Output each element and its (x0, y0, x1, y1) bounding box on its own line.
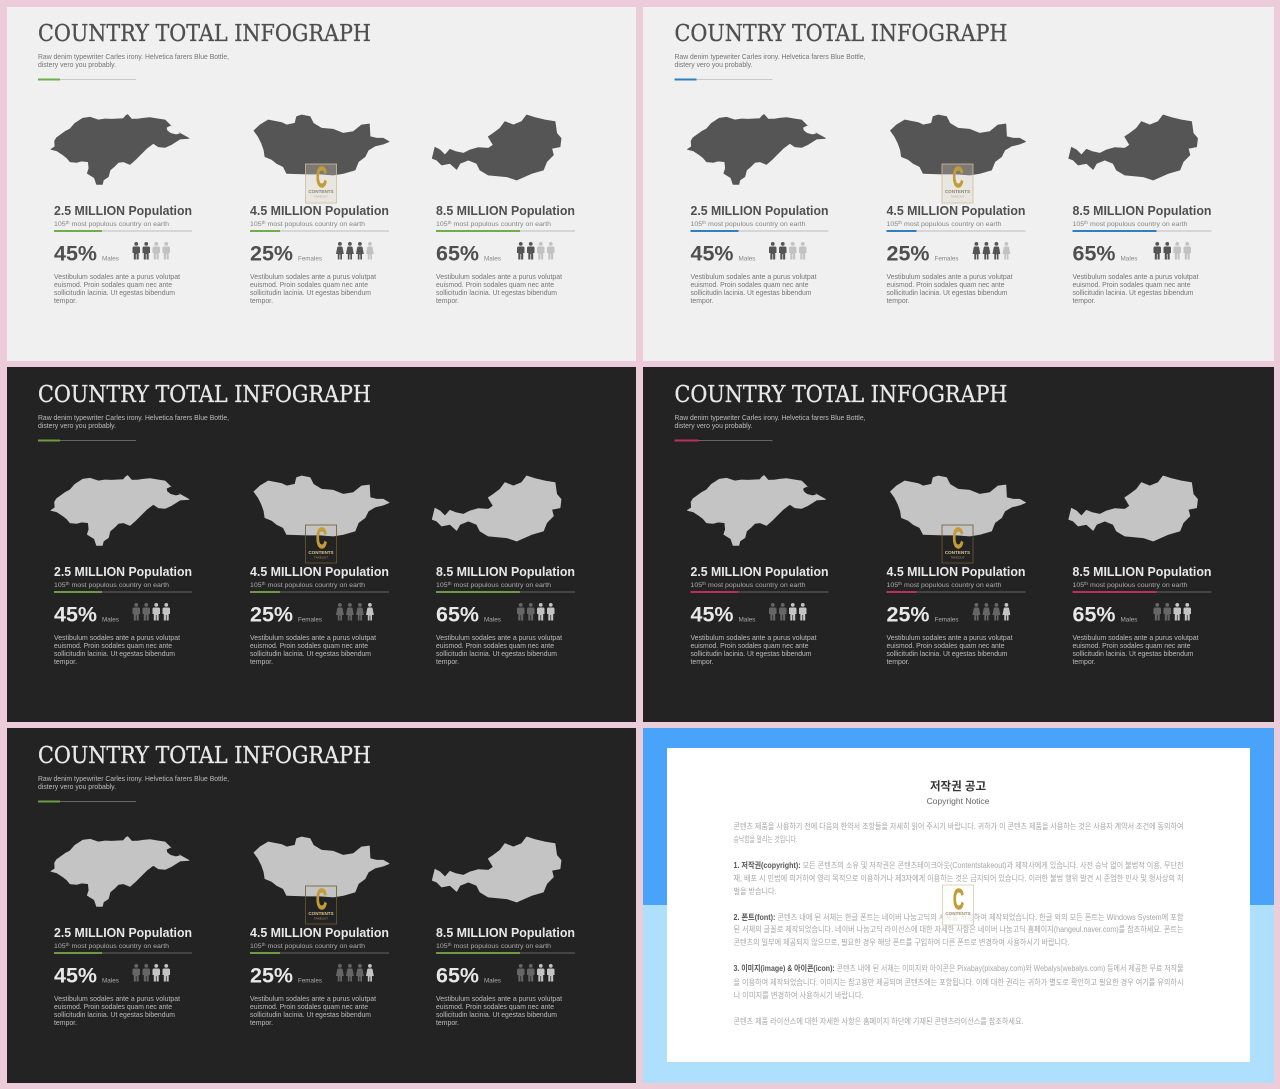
icons: people (132, 964, 170, 982)
intro text: 콘텐츠 제품을 사용하기 전에 다음의 한약서 조항들을 자세히 읽어 주시기 바랍니다. 귀하가 이 콘텐츠 제품을 사용하는 것은 사용자 계약서 조건에 동의하여 (734, 821, 1184, 831)
map: Mongolia (254, 837, 389, 897)
section 1: copyright: 벌을 받습니다. (734, 886, 776, 896)
column: Austria (1069, 115, 1212, 305)
icons: people (517, 603, 554, 620)
description: euismod. Proin sodales quam nec ante (690, 280, 808, 289)
population heading: 8.5 MILLION Population (436, 564, 575, 579)
subtitle: distery vero you probably. (38, 60, 116, 69)
progress bar (690, 230, 828, 232)
watermark logo: CONTENTS (308, 189, 334, 194)
gender label: Males (484, 256, 501, 262)
description: euismod. Proin sodales quam nec ante (250, 280, 368, 289)
percentage: 25% (886, 602, 930, 626)
description (690, 272, 816, 305)
section 1: copyright: 재, 배포 시 민법에 의거하여 영리 목적으로 이용하거나 제3자에게 이용하는 것은 금지되어 있습니다. 이러한 불법 행위 발견 시 준엄한 민사 및 형사상의 처 (734, 873, 1184, 883)
subtitle: distery vero you probably. (674, 421, 753, 430)
description (250, 633, 376, 666)
watermark logo: TAKEOUT (314, 194, 328, 198)
gender label: Males (102, 978, 119, 984)
rank note: most populous country on earth (70, 221, 169, 228)
column: Mongolia (250, 115, 389, 305)
percentage: 65% (436, 242, 479, 266)
section 3: image and icon: 을 이용하여 제작되었습니다. 이미지는 참고용만 제공되며 콘텐츠에는 포함됩니다. 이에 대한 권리는 귀하가 별도로 확인하고 필요한 경우 여기를 유의하시 (734, 977, 1184, 987)
description: Vestibulum sodales ante a purus volutpat (436, 994, 562, 1003)
rank note: th (262, 220, 266, 225)
percentage: 25% (250, 602, 293, 626)
rank note: most populous country on earth (452, 221, 551, 228)
rank note: 105 (1072, 582, 1084, 589)
watermark logo: CONTENTS (308, 550, 334, 555)
rank note: most populous country on earth (266, 582, 365, 589)
icons: people (769, 242, 806, 260)
subtitle: Raw denim typewriter Carles irony. Helvetica farers Blue Bottle, (674, 52, 866, 61)
watermark logo: C (953, 884, 964, 916)
intro text (734, 821, 1184, 844)
title rule (38, 78, 136, 80)
icons: people (336, 242, 374, 260)
rank note: 105 (54, 943, 65, 950)
description: Vestibulum sodales ante a purus volutpat (1072, 633, 1198, 642)
rank note: 105 (436, 582, 447, 589)
gender label: Males (102, 618, 119, 624)
column: Austria (432, 115, 575, 305)
rank note: 105 (436, 221, 447, 228)
watermark logo (306, 162, 336, 203)
rank note: 105 (54, 582, 65, 589)
description: sollicitudin lacinia. Ut egestas bibendum (250, 288, 371, 297)
population heading: 2.5 MILLION Population (54, 925, 192, 940)
description: sollicitudin lacinia. Ut egestas bibendum (690, 649, 812, 658)
map: Austria (432, 115, 561, 180)
watermark logo: C (952, 523, 964, 555)
description: euismod. Proin sodales quam nec ante (886, 280, 1004, 289)
description: euismod. Proin sodales quam nec ante (1072, 641, 1190, 650)
gender label: Females (298, 978, 322, 984)
description: tempor. (1072, 657, 1096, 666)
description (54, 994, 180, 1027)
gender label: Females (934, 618, 958, 624)
rank note: th (66, 942, 70, 947)
map: Honduras (687, 115, 825, 184)
watermark logo: TAKEOUT (314, 556, 328, 560)
rank note: 105 (690, 221, 702, 228)
population heading: 4.5 MILLION Population (886, 203, 1026, 218)
rank note: 105 (54, 221, 65, 228)
map: Mongolia (254, 476, 389, 536)
rank note: th (1084, 220, 1089, 225)
description: euismod. Proin sodales quam nec ante (1072, 280, 1190, 289)
rank note: 105 (250, 582, 261, 589)
section 3: image and icon (734, 963, 1184, 1000)
description: tempor. (886, 296, 910, 305)
description: tempor. (54, 1018, 77, 1027)
description: tempor. (1072, 296, 1096, 305)
rank note: th (448, 942, 452, 947)
watermark logo: TAKEOUT (314, 916, 328, 920)
gender label: Males (738, 256, 756, 262)
map: Mongolia (890, 476, 1025, 536)
rank note: 105 (1072, 221, 1084, 228)
watermark logo: C (316, 884, 327, 916)
progress bar (1072, 230, 1212, 232)
subtitle: Raw denim typewriter Carles irony. Helvetica farers Blue Bottle, (38, 52, 229, 61)
column: Austria (432, 837, 575, 1027)
map: Mongolia (890, 115, 1025, 175)
rank note: most populous country on earth (452, 582, 551, 589)
column: Honduras (51, 476, 192, 666)
icons: people (132, 603, 170, 620)
title rule (674, 440, 772, 442)
progress bar (250, 230, 389, 232)
description: tempor. (436, 1018, 459, 1027)
rank note: th (448, 581, 452, 586)
description: Vestibulum sodales ante a purus volutpat (1072, 272, 1198, 281)
percentage: 65% (436, 964, 479, 988)
description: euismod. Proin sodales quam nec ante (54, 1002, 172, 1011)
percentage: 45% (54, 242, 97, 266)
description: sollicitudin lacinia. Ut egestas bibendum (54, 649, 175, 658)
rank note: th (898, 581, 903, 586)
gender label: Males (1120, 256, 1138, 262)
panel: copyright notice (643, 728, 1274, 1083)
rank note: most populous country on earth (1088, 221, 1188, 228)
percentage: 25% (250, 242, 293, 266)
description: Vestibulum sodales ante a purus volutpat (690, 633, 816, 642)
rank note: th (702, 220, 707, 225)
column: Mongolia (886, 115, 1026, 305)
watermark logo (942, 523, 973, 563)
map: Mongolia (254, 115, 389, 175)
population heading: 2.5 MILLION Population (54, 203, 192, 218)
watermark logo (306, 523, 336, 563)
progress bar (54, 952, 192, 954)
notice subheading: Copyright Notice (927, 796, 990, 806)
population heading: 8.5 MILLION Population (436, 203, 575, 218)
title: COUNTRY TOTAL INFOGRAPH (674, 382, 1008, 408)
watermark logo: CONTENTS (308, 911, 334, 916)
watermark logo: C (952, 162, 964, 194)
description: Vestibulum sodales ante a purus volutpat (54, 272, 180, 281)
icons: people (517, 964, 554, 982)
percentage: 65% (1072, 602, 1116, 626)
rank note: most populous country on earth (266, 221, 365, 228)
section 2: font: 콘텐츠의 일부에 제공되지 않으므로, 필요한 경우 해당 폰트를 구입하여 다른 폰트로 변경하여 사용하시기 바랍니다. (734, 937, 1070, 947)
map: Honduras (51, 115, 189, 184)
column: Honduras (687, 115, 829, 305)
description: tempor. (436, 657, 459, 666)
percentage: 65% (436, 602, 479, 626)
title: COUNTRY TOTAL INFOGRAPH (38, 21, 371, 47)
map: Austria (432, 476, 561, 541)
description (886, 633, 1012, 666)
rank note: 105 (690, 582, 702, 589)
subtitle: Raw denim typewriter Carles irony. Helvetica farers Blue Bottle, (38, 413, 229, 422)
description (886, 272, 1012, 305)
panel: light slide green (7, 7, 636, 361)
notice heading: 저작권 공고 (930, 779, 986, 793)
progress bar (436, 230, 575, 232)
license note: 콘텐츠 제품 라이선스에 대한 자세한 사항은 홈페이지 하단에 기재된 콘텐츠라이선스를 참조하세요. (734, 1016, 1024, 1026)
description (250, 994, 376, 1027)
watermark logo: TAKEOUT (951, 194, 965, 198)
title: COUNTRY TOTAL INFOGRAPH (38, 743, 371, 769)
percentage: 45% (54, 964, 97, 988)
description: tempor. (886, 657, 910, 666)
rank note: 105 (436, 943, 447, 950)
rank note: most populous country on earth (902, 582, 1002, 589)
section 3: image and icon: 3. 이미지(image) & 아이콘(icon): 콘텐츠 내에 된 서체는 이미지와 아이콘은 Pixabay(pixabay.com)와 Webalys(webalys.com) 등에서 제공한 무료 저작물 (734, 963, 1184, 973)
description: tempor. (250, 296, 273, 305)
percentage: 65% (1072, 242, 1116, 266)
rank note: most populous country on earth (70, 943, 169, 950)
section 3: image and icon: 니 이미지를 변경하여 사용하시기 바랍니다. (734, 990, 864, 1000)
description: Vestibulum sodales ante a purus volutpat (54, 994, 180, 1003)
subtitle: Raw denim typewriter Carles irony. Helvetica farers Blue Bottle, (38, 774, 229, 783)
subtitle: Raw denim typewriter Carles irony. Helvetica farers Blue Bottle, (674, 413, 866, 422)
rank note: 105 (886, 221, 898, 228)
description (1072, 272, 1198, 305)
description: sollicitudin lacinia. Ut egestas bibendum (436, 649, 557, 658)
column: Austria (1069, 476, 1212, 666)
description: sollicitudin lacinia. Ut egestas bibendum (886, 288, 1008, 297)
rank note: most populous country on earth (70, 582, 169, 589)
watermark logo: CONTENTS (945, 189, 970, 194)
rank note: th (898, 220, 903, 225)
description: Vestibulum sodales ante a purus volutpat (886, 272, 1012, 281)
description (54, 272, 180, 305)
population heading: 2.5 MILLION Population (690, 564, 829, 579)
rank note: most populous country on earth (266, 943, 365, 950)
population heading: 4.5 MILLION Population (250, 203, 389, 218)
description (690, 633, 816, 666)
percentage: 25% (250, 964, 293, 988)
gender label: Females (298, 256, 322, 262)
percentage: 45% (690, 242, 734, 266)
section 2: font: 된 서체의 글꼴로 제작되었습니다. 네이버 나눔고딕 라이선스에 대한 자세한 사항은 네이버 나눔고딕 홈페이지(hangeul.naver.com)를 참조하세요. 폰트는 (734, 924, 1184, 934)
title: COUNTRY TOTAL INFOGRAPH (674, 21, 1008, 47)
subtitle: distery vero you probably. (674, 60, 753, 69)
description: euismod. Proin sodales quam nec ante (690, 641, 808, 650)
rank note: th (262, 581, 266, 586)
gender label: Males (484, 618, 501, 624)
description: tempor. (690, 657, 714, 666)
description: euismod. Proin sodales quam nec ante (54, 280, 172, 289)
rank note: th (66, 581, 70, 586)
description: euismod. Proin sodales quam nec ante (436, 641, 554, 650)
description: sollicitudin lacinia. Ut egestas bibendum (690, 288, 812, 297)
progress bar (54, 591, 192, 593)
description: euismod. Proin sodales quam nec ante (436, 280, 554, 289)
description (1072, 633, 1198, 666)
description: Vestibulum sodales ante a purus volutpat (54, 633, 180, 642)
population heading: 8.5 MILLION Population (436, 925, 575, 940)
subtitle: distery vero you probably. (38, 782, 116, 791)
percentage: 45% (54, 602, 97, 626)
column: Honduras (51, 115, 192, 305)
watermark logo: CONTENTS (945, 911, 971, 916)
description: tempor. (250, 657, 273, 666)
rank note: 105 (886, 582, 898, 589)
description: euismod. Proin sodales quam nec ante (250, 1002, 368, 1011)
description: tempor. (54, 296, 77, 305)
map: Austria (1069, 476, 1197, 541)
map: Honduras (687, 476, 825, 545)
rank note: th (262, 942, 266, 947)
description (250, 272, 376, 305)
rank note: most populous country on earth (902, 221, 1002, 228)
icons: people (1154, 603, 1191, 620)
rank note: 105 (250, 943, 261, 950)
description: sollicitudin lacinia. Ut egestas bibendum (1072, 288, 1194, 297)
description: Vestibulum sodales ante a purus volutpat (250, 994, 376, 1003)
gender label: Males (102, 256, 119, 262)
icons: people (1154, 242, 1191, 260)
panel: light slide blue (643, 7, 1274, 361)
watermark logo (942, 884, 974, 925)
panel: dark slide green, row 2 (7, 367, 636, 722)
title: COUNTRY TOTAL INFOGRAPH (38, 382, 371, 408)
population heading: 2.5 MILLION Population (690, 203, 829, 218)
description: sollicitudin lacinia. Ut egestas bibendum (54, 1010, 175, 1019)
population heading: 8.5 MILLION Population (1072, 203, 1212, 218)
description: euismod. Proin sodales quam nec ante (54, 641, 172, 650)
subtitle (38, 52, 229, 69)
column: Austria (432, 476, 575, 666)
subtitle (38, 413, 229, 430)
description: Vestibulum sodales ante a purus volutpat (436, 272, 562, 281)
population heading: 2.5 MILLION Population (54, 564, 192, 579)
population heading: 4.5 MILLION Population (250, 925, 389, 940)
rank note: th (66, 220, 70, 225)
map: Austria (1069, 115, 1197, 180)
column: Mongolia (250, 837, 389, 1027)
rank note: th (702, 581, 707, 586)
progress bar (690, 591, 828, 593)
rank note: most populous country on earth (1088, 582, 1188, 589)
description: sollicitudin lacinia. Ut egestas bibendum (436, 1010, 557, 1019)
percentage: 25% (886, 242, 930, 266)
watermark logo (942, 162, 973, 203)
progress bar (886, 591, 1026, 593)
description (54, 633, 180, 666)
description (436, 633, 562, 666)
subtitle (674, 52, 866, 69)
gender label: Females (298, 618, 322, 624)
progress bar (54, 230, 192, 232)
progress bar (436, 591, 575, 593)
section 2: font (734, 912, 1184, 947)
title rule (674, 78, 772, 80)
description: sollicitudin lacinia. Ut egestas bibendum (250, 1010, 371, 1019)
watermark logo: CONTENTS (945, 550, 970, 555)
description: sollicitudin lacinia. Ut egestas bibendum (250, 649, 371, 658)
description: tempor. (436, 296, 459, 305)
gender label: Females (934, 256, 958, 262)
title rule (38, 800, 136, 802)
section 1: copyright (734, 860, 1184, 896)
watermark logo: C (316, 523, 327, 555)
population heading: 8.5 MILLION Population (1072, 564, 1212, 579)
column: Mongolia (250, 476, 389, 666)
progress bar (1072, 591, 1212, 593)
description: Vestibulum sodales ante a purus volutpat (886, 633, 1012, 642)
subtitle (674, 413, 866, 430)
progress bar (250, 591, 389, 593)
map: Honduras (51, 476, 189, 545)
description: euismod. Proin sodales quam nec ante (250, 641, 368, 650)
icons: people (336, 964, 374, 982)
description: sollicitudin lacinia. Ut egestas bibendum (436, 288, 557, 297)
icons: people (336, 603, 374, 620)
icons: people (517, 242, 554, 260)
column: Honduras (687, 476, 829, 666)
description: tempor. (54, 657, 77, 666)
column: Honduras (51, 837, 192, 1027)
rank note: most populous country on earth (706, 221, 806, 228)
description (436, 994, 562, 1027)
icons: people (972, 603, 1010, 620)
watermark logo: C (316, 162, 327, 194)
map: Austria (432, 837, 561, 902)
panel: dark slide green, row 3 (7, 728, 636, 1083)
description: sollicitudin lacinia. Ut egestas bibendum (886, 649, 1008, 658)
title rule (38, 440, 136, 442)
gender label: Males (738, 618, 756, 624)
description (436, 272, 562, 305)
percentage: 45% (690, 602, 734, 626)
description: euismod. Proin sodales quam nec ante (436, 1002, 554, 1011)
progress bar (886, 230, 1026, 232)
progress bar (250, 952, 389, 954)
intro text: 승낙함을 알리는 것입니다. (734, 834, 798, 844)
section 1: copyright: 1. 저작권(copyright): 모든 콘텐츠의 소유 및 저작권은 콘텐츠테이크아웃(Contentstakeout)과 제작사에게 있습니다. 사전 승낙 없이 불법적 이용, 무단전 (734, 860, 1184, 870)
population heading: 4.5 MILLION Population (886, 564, 1026, 579)
column: Mongolia (886, 476, 1026, 666)
icons: people (769, 603, 806, 620)
description: Vestibulum sodales ante a purus volutpat (690, 272, 816, 281)
description: Vestibulum sodales ante a purus volutpat (250, 272, 376, 281)
description: sollicitudin lacinia. Ut egestas bibendum (1072, 649, 1194, 658)
section 2: font: 2. 폰트(font): 콘텐츠 내에 된 서체는 한글 폰트는 네이버 나눔고딕의 서체를 사용하여 제작되었습니다. 한글 외의 모든 폰트는 Windows System에 포함 (734, 912, 1184, 922)
panel: dark slide crimson (643, 367, 1274, 722)
watermark logo: TAKEOUT (951, 556, 965, 560)
subtitle: distery vero you probably. (38, 421, 116, 430)
rank note: th (1084, 581, 1089, 586)
rank note: 105 (250, 221, 261, 228)
description: sollicitudin lacinia. Ut egestas bibendum (54, 288, 175, 297)
gender label: Males (484, 978, 501, 984)
description: Vestibulum sodales ante a purus volutpat (436, 633, 562, 642)
description: euismod. Proin sodales quam nec ante (886, 641, 1004, 650)
subtitle (38, 774, 229, 791)
population heading: 4.5 MILLION Population (250, 564, 389, 579)
rank note: most populous country on earth (706, 582, 806, 589)
watermark logo (306, 884, 336, 924)
progress bar (436, 952, 575, 954)
rank note: most populous country on earth (452, 943, 551, 950)
rank note: th (448, 220, 452, 225)
map: Honduras (51, 837, 189, 906)
description: tempor. (250, 1018, 273, 1027)
icons: people (132, 242, 170, 260)
icons: people (972, 242, 1010, 260)
description: tempor. (690, 296, 714, 305)
description: Vestibulum sodales ante a purus volutpat (250, 633, 376, 642)
gender label: Males (1120, 618, 1138, 624)
